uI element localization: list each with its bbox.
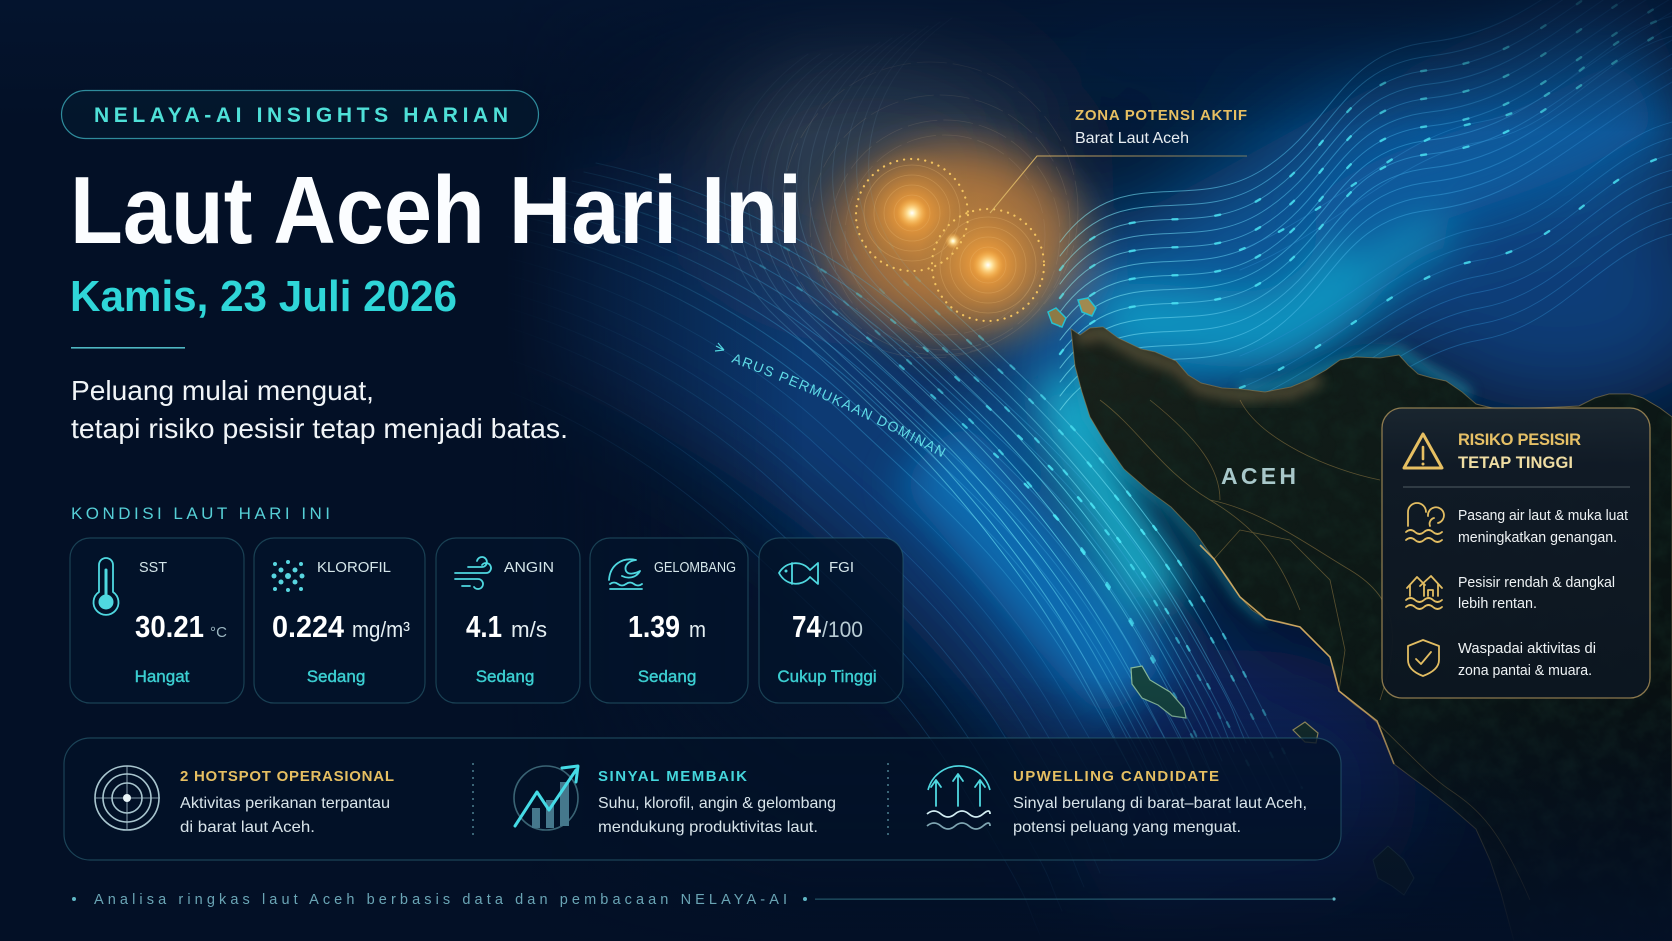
risk item: tides [1406,503,1629,546]
risk item: shield: zona pantai & muara. [1458,662,1592,679]
islands [1048,298,1414,895]
card: FGI: Cukup Tinggi [777,667,877,686]
ocean current streamlines [390,0,1672,935]
risk item: tides: meningkatkan genangan. [1458,529,1617,546]
insight: improving signal [514,766,836,836]
land: Aceh [1060,320,1672,941]
footer note [72,892,1336,908]
card: Angin [436,538,580,703]
card: Angin: Sedang [476,667,534,686]
card: FGI: 74 [792,609,822,644]
footer note: Analisa ringkas laut Aceh berbasis data dan pembacaan NELAYA-AI [94,892,787,908]
card: FGI [759,538,903,703]
risk item: low coast: lebih rentan. [1458,595,1537,612]
card: Gelombang: GELOMBANG [654,559,736,576]
icon: warning [1404,434,1442,468]
date: Kamis, 23 Juli 2026 [70,272,457,321]
hotspot glow [782,62,1120,370]
insight: hotspot: di barat laut Aceh. [180,819,315,836]
risk item: tides: Pasang air laut & muka luat [1458,507,1629,524]
card: SST: Hangat [135,667,190,686]
callout: active potential zone: ZONA POTENSI AKTIF [1075,107,1247,124]
subtitle: tetapi risiko pesisir tetap menjadi batas. [71,413,568,444]
card: FGI: /100 [822,617,863,642]
section heading: sea conditions: KONDISI LAUT HARI INI [71,504,330,523]
title: Laut Aceh Hari Ini [70,157,802,264]
subtitle: Peluang mulai menguat, [71,375,374,406]
risk heading [1458,431,1581,472]
card: Angin: ANGIN [504,559,554,576]
label: Aceh: ACEH [1221,463,1296,489]
card: Klorofil: mg/m³ [352,617,410,642]
insight: improving signal: mendukung produktivitas laut. [598,819,818,836]
card: Gelombang: m [689,617,706,642]
metric cards [70,538,903,703]
card: Klorofil [254,538,425,703]
insight: upwelling: Sinyal berulang di barat–barat laut Aceh, [1013,795,1307,812]
tag pill: NELAYA-AI INSIGHTS HARIAN [94,104,508,127]
risk item: low coast [1406,574,1615,612]
card: Angin: m/s [511,617,547,642]
insight panel [64,738,1341,860]
risk heading: RISIKO PESISIR [1458,431,1581,449]
tag pill [62,90,538,138]
risk item: shield: Waspadai aktivitas di [1458,640,1596,657]
risk panel [1382,408,1650,698]
card: SST: 30.21 [135,609,204,644]
insight: upwelling [927,766,1307,836]
callout: active potential zone [990,107,1247,213]
card: Gelombang: 1.39 [628,609,680,644]
shallow water glow [1075,350,1470,619]
label: dominant surface current: ARUS PERMUKAAN DOMINAN [731,354,946,457]
card: Klorofil: KLOROFIL [317,559,391,576]
card: SST: SST [139,559,167,576]
card: Gelombang: Sedang [638,667,696,686]
risk item: low coast: Pesisir rendah & dangkal [1458,574,1615,591]
subtitle [71,347,568,444]
card: Gelombang [590,538,748,703]
risk item: shield [1408,640,1596,679]
insight: hotspot [95,766,394,836]
card: Klorofil: 0.224 [272,609,345,644]
card: SST [70,538,244,703]
insight: improving signal: Suhu, klorofil, angin & gelombang [598,795,836,812]
callout: active potential zone: Barat Laut Aceh [1075,130,1189,147]
insight: hotspot: 2 HOTSPOT OPERASIONAL [180,768,394,785]
card: Klorofil: Sedang [307,667,365,686]
insight: upwelling: UPWELLING CANDIDATE [1013,768,1219,785]
card: FGI: FGI [829,559,854,576]
card: Angin: 4.1 [466,609,502,644]
card: SST: °C [210,624,227,641]
risk heading: TETAP TINGGI [1458,454,1573,472]
insight: upwelling: potensi peluang yang menguat. [1013,819,1241,836]
insight: hotspot: Aktivitas perikanan terpantau [180,795,390,812]
insight: improving signal: SINYAL MEMBAIK [598,768,747,785]
